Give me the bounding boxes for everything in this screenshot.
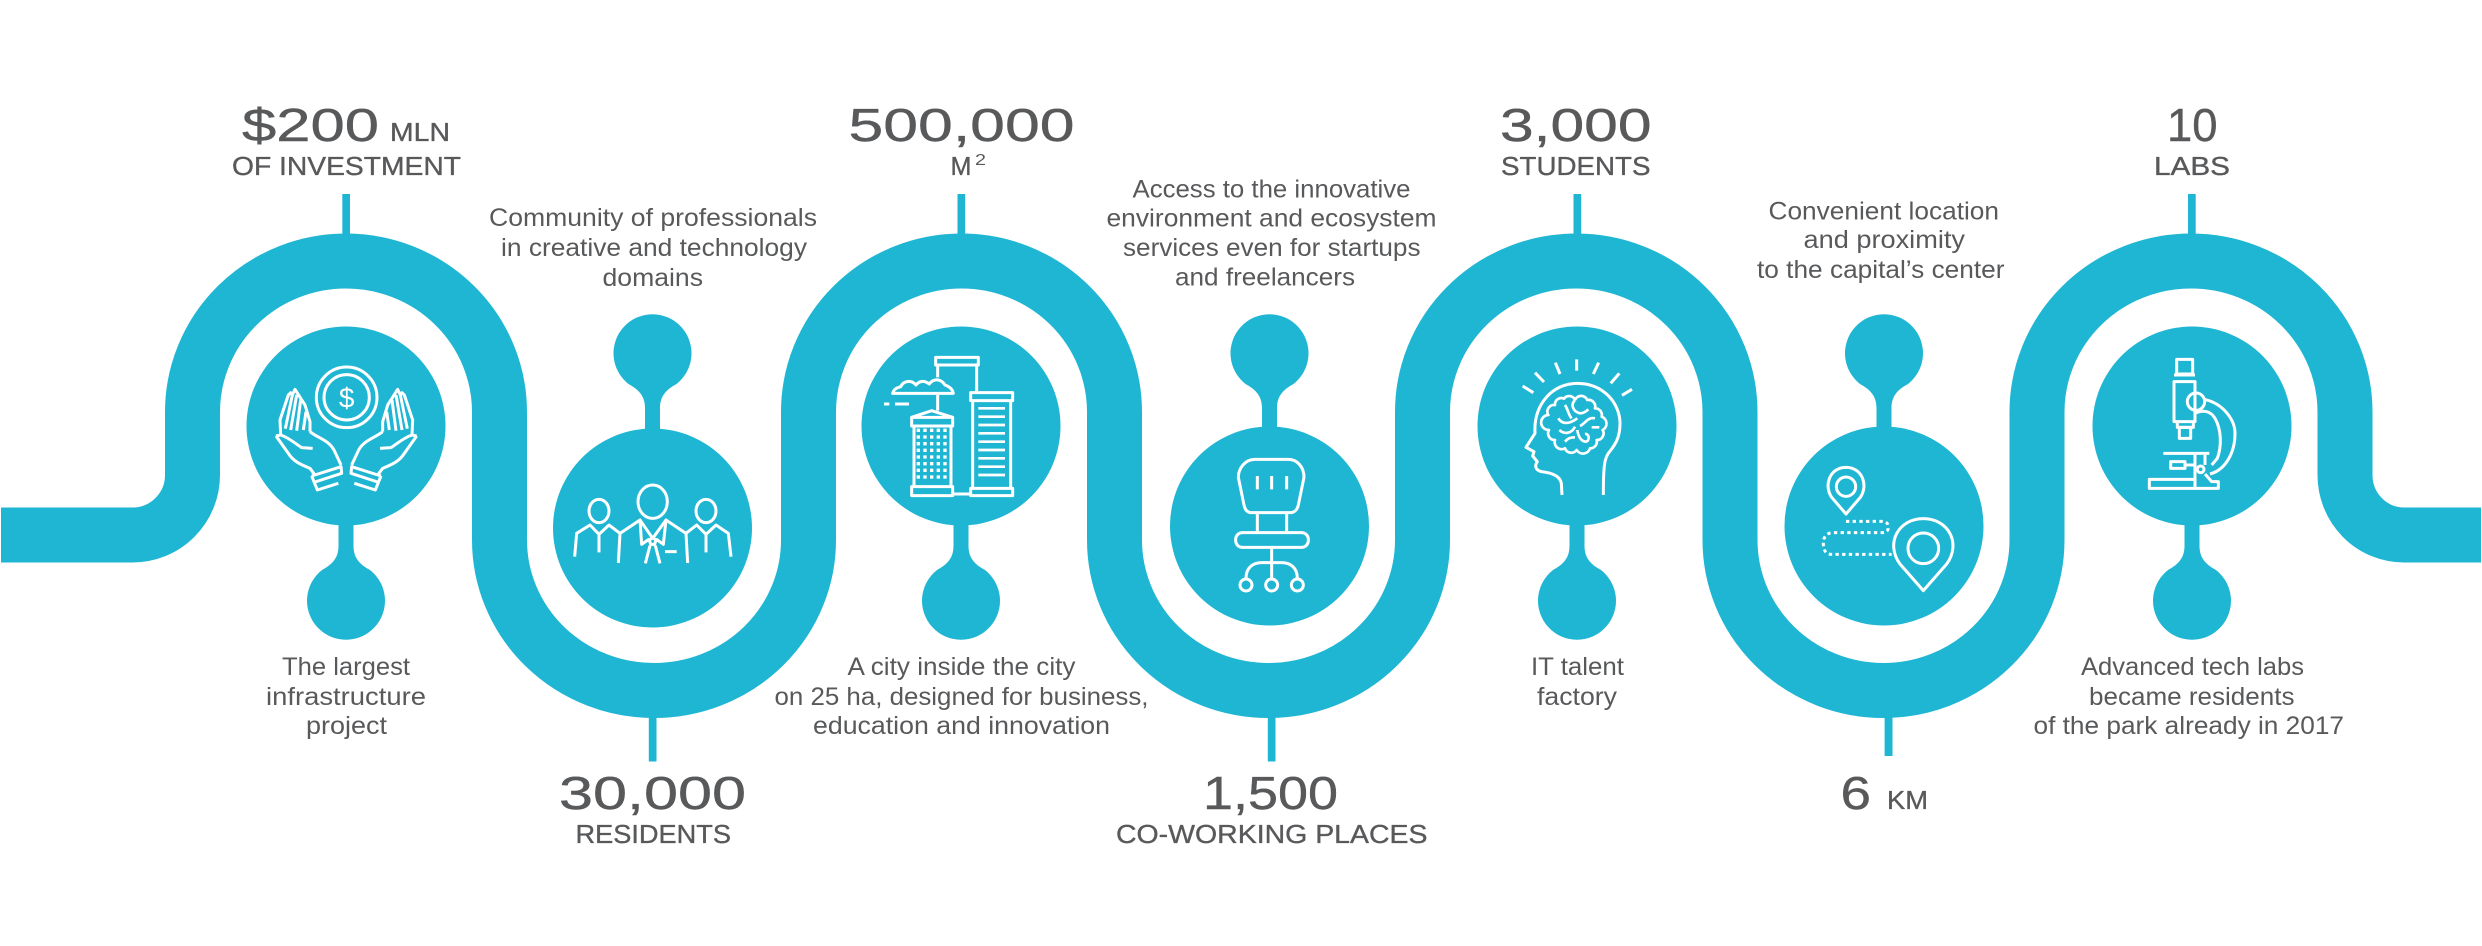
- icon: city buildings: [884, 357, 1013, 496]
- description: Access to the innovative: [1132, 176, 1410, 204]
- heading: 30,000 residents: 30,000: [559, 767, 746, 819]
- heading: 1,500 co-working places: 1,500: [1203, 767, 1338, 819]
- icon: hands holding a coin: [276, 367, 417, 490]
- heading: 500,000 m2: M: [950, 151, 972, 181]
- description: project: [306, 712, 387, 740]
- icon: head with brain: [1523, 359, 1632, 495]
- panel: labs: [2034, 99, 2344, 740]
- description: [489, 204, 817, 292]
- icon circle with stem and node: [246, 326, 446, 640]
- tick: [1885, 716, 1892, 756]
- heading: 6 km: [1840, 767, 1928, 819]
- description: on 25 ha, designed for business,: [774, 683, 1148, 711]
- heading: 30,000 residents: [559, 767, 746, 849]
- description: IT talent: [1531, 653, 1624, 681]
- description: factory: [1537, 683, 1618, 711]
- icon circle with stem and node: [2092, 326, 2292, 640]
- description: and freelancers: [1175, 264, 1355, 292]
- description: to the capital’s center: [1757, 256, 2004, 284]
- description: [1531, 653, 1624, 711]
- description: environment and ecosystem: [1106, 204, 1436, 232]
- icon circle with stem and node: [1170, 314, 1369, 626]
- panel: area: [774, 99, 1148, 740]
- description: in creative and technology: [501, 234, 808, 262]
- description: education and innovation: [813, 712, 1110, 740]
- heading: 10 labs: [2154, 99, 2230, 181]
- icon circle with stem and node: [553, 314, 752, 628]
- description: Convenient location: [1768, 198, 1999, 226]
- heading: 10 labs: LABS: [2154, 151, 2230, 181]
- icon circle with stem and node: [862, 326, 1060, 640]
- heading: 1,500 co-working places: CO-WORKING PLACES: [1116, 819, 1428, 849]
- heading: 500,000 m2: 500,000: [848, 99, 1074, 151]
- heading: 3,000 students: 3,000: [1500, 99, 1652, 151]
- heading: 30,000 residents: RESIDENTS: [576, 819, 731, 849]
- description: became residents: [2089, 683, 2294, 711]
- tick: [2188, 194, 2196, 236]
- panel: investment: [232, 99, 461, 740]
- heading: 3,000 students: STUDENTS: [1501, 151, 1650, 181]
- heading: $200 mln of investment: OF INVESTMENT: [232, 151, 461, 181]
- icon: office chair: [1236, 459, 1308, 591]
- description: The largest: [282, 653, 410, 681]
- description: Advanced tech labs: [2081, 653, 2304, 681]
- icon circle with stem and node: [1784, 314, 1984, 626]
- panel: residents: [489, 204, 817, 849]
- tick: [649, 716, 656, 762]
- description: [2034, 653, 2344, 740]
- icon circle with stem and node: [1478, 326, 1676, 640]
- description: domains: [602, 264, 703, 292]
- description: [1106, 176, 1436, 292]
- tick: [1574, 194, 1581, 236]
- panel: co-working: [1106, 176, 1436, 849]
- heading: 6 km: 6: [1840, 767, 1871, 819]
- heading: 3,000 students: [1500, 99, 1652, 181]
- description: infrastructure: [266, 683, 426, 711]
- description: services even for startups: [1123, 234, 1420, 262]
- heading: 500,000 m2: 2: [975, 152, 986, 169]
- description: [266, 653, 426, 740]
- tick: [958, 194, 965, 236]
- icon: three professionals: [575, 485, 731, 563]
- serpentine ribbon: [1, 261, 2481, 690]
- description: and proximity: [1804, 226, 1966, 254]
- tick: [1268, 716, 1276, 762]
- heading: 10 labs: 10: [2167, 99, 2218, 151]
- description: A city inside the city: [848, 653, 1076, 681]
- icon: microscope: [2149, 359, 2235, 488]
- description: [774, 653, 1148, 740]
- description: of the park already in 2017: [2034, 712, 2344, 740]
- panel: students: [1478, 99, 1676, 711]
- tick: [342, 194, 350, 236]
- heading: 6 km: KM: [1887, 785, 1928, 815]
- heading: 1,500 co-working places: [1116, 767, 1428, 849]
- heading: $200 mln of investment: $200: [242, 99, 379, 151]
- heading: $200 mln of investment: [232, 99, 461, 181]
- heading: $200 mln of investment: MLN: [390, 117, 450, 147]
- icon: hands holding a coin: $: [339, 382, 355, 413]
- heading: 500,000 m2: [848, 99, 1074, 181]
- description: Community of professionals: [489, 204, 817, 232]
- icon: route between map pins: [1823, 467, 1953, 591]
- description: [1757, 198, 2004, 284]
- panel: distance: [1757, 198, 2004, 819]
